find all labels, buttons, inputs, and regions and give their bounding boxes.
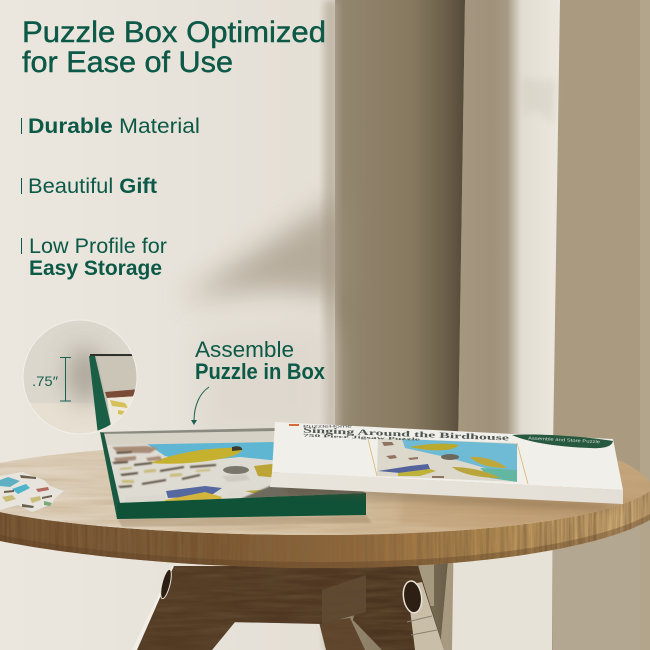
lid title: Singing Around the Birdhouse (303, 426, 510, 442)
lid green label (512, 434, 613, 448)
table top (0, 450, 650, 535)
lid logo (289, 424, 352, 428)
title (22, 16, 326, 79)
lid top face (272, 422, 623, 490)
box green front wall (117, 493, 366, 519)
feature: low profile (21, 235, 167, 280)
height label: .75″ (32, 373, 58, 389)
feature: beautiful gift: Beautiful Gift (28, 175, 157, 198)
box back wall (102, 429, 277, 446)
lid logo: PuzzleHome (303, 424, 352, 428)
assembled puzzle (107, 442, 366, 503)
title: Puzzle Box Optimized (22, 16, 326, 49)
round table (0, 435, 650, 650)
lid shadow (280, 482, 623, 510)
inset circle: box height (23, 320, 140, 435)
feature: low profile: Low Profile for (29, 235, 167, 258)
feature list (21, 115, 200, 280)
lid green label: Assemble and Store Puzzle (528, 436, 601, 444)
height bracket (60, 358, 71, 401)
feature: low profile: Easy Storage (29, 257, 162, 280)
open puzzle box (100, 428, 370, 519)
lid front edge (270, 472, 623, 504)
lid gold lines (368, 439, 528, 484)
lid picture (377, 438, 517, 482)
lid title: 750 Piece Jigsaw Puzzle (303, 433, 421, 442)
assemble callout: Puzzle in Box (195, 359, 326, 384)
assemble callout (195, 337, 326, 384)
loose puzzle pieces (0, 472, 64, 512)
lid title (303, 426, 510, 442)
table legs (130, 560, 450, 650)
arrow to box (191, 387, 209, 425)
assemble callout: Assemble (195, 337, 294, 362)
title: for Ease of Use (22, 46, 233, 79)
table rim (0, 491, 650, 568)
closed box lid (270, 422, 623, 510)
feature: durable material: Durable Material (28, 115, 200, 138)
box green left wall (100, 432, 120, 519)
